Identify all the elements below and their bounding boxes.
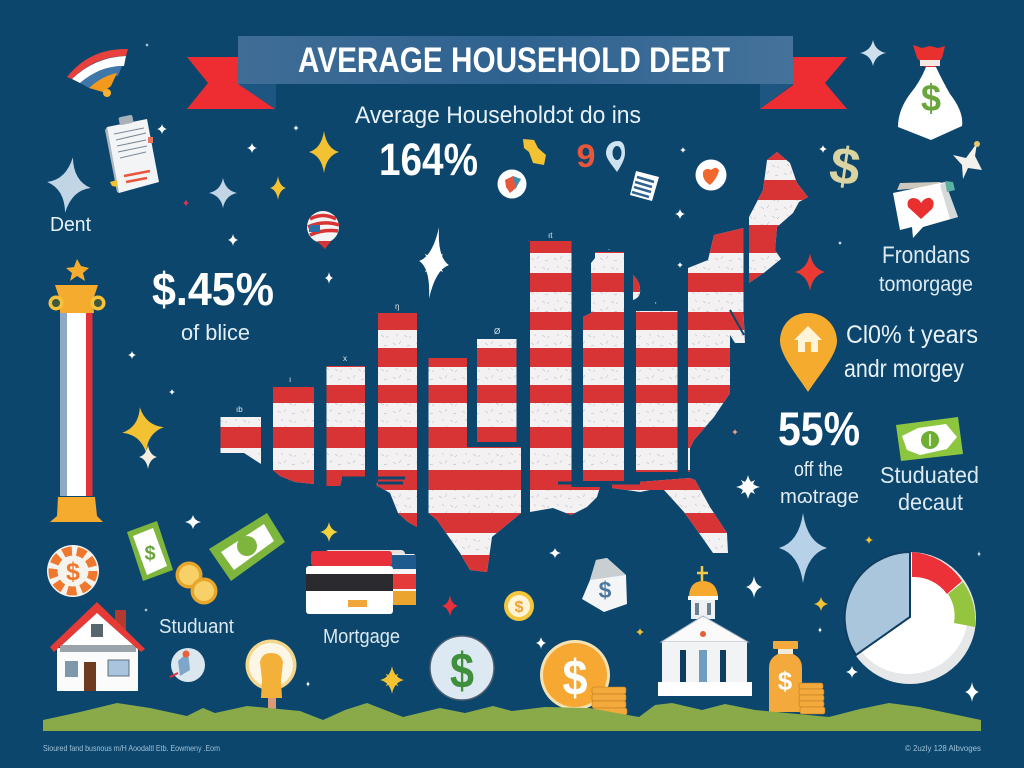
green hills xyxy=(43,703,981,731)
icon: money bag xyxy=(898,45,962,140)
small map markers: Ø xyxy=(494,327,500,336)
footer right: © 2uzly 128 Albvoges xyxy=(905,743,981,753)
icon: banknote small: $ xyxy=(144,543,156,565)
icon: green dollar coin: $ xyxy=(450,643,474,699)
icon: white star with tip xyxy=(953,141,982,179)
label: Frondans tomorgage: tomorgage xyxy=(879,273,973,296)
text icon: 9 and pin xyxy=(576,138,625,174)
stat: $.45% of blice: of blice xyxy=(181,320,250,345)
icon: yellow tag xyxy=(523,139,546,165)
icon: coin stack right xyxy=(799,683,825,714)
stat: 10 years mortgage: Cl0% t years xyxy=(846,321,978,349)
icon: orange location pin with house xyxy=(780,313,837,392)
footer left: Sioured fand busnous m/H Aoodaltl Etb. Eowmeny .Eom xyxy=(43,743,220,753)
small map markers: x xyxy=(343,354,347,363)
label: Studuated decaut: Studuated xyxy=(880,462,979,488)
icon: poker chip: $ xyxy=(66,558,80,586)
icon: clipboard xyxy=(105,115,159,193)
stat: $.45% of blice: $.45% xyxy=(152,263,274,315)
icon: large gold coin: $ xyxy=(562,650,588,706)
small map markers: ıb xyxy=(236,405,243,414)
decorative stars xyxy=(43,40,981,702)
label: Dent: Dent xyxy=(50,214,91,236)
label: Studuated decaut xyxy=(880,462,979,515)
icon: gold jar xyxy=(769,641,802,712)
icon: paper bag xyxy=(582,558,627,612)
stat: 55% off the mortgage: 55% xyxy=(778,402,860,455)
striped US map xyxy=(200,140,820,580)
icon: banknote small xyxy=(127,521,173,581)
pie chart xyxy=(844,552,976,684)
title: AVERAGE HOUSEHOLD DEBT xyxy=(298,41,730,80)
icon: capitol building xyxy=(658,566,752,696)
icon: banknote large xyxy=(209,513,285,581)
text icon: 9 and pin: 9 xyxy=(576,138,596,174)
small map markers: ' xyxy=(655,301,657,310)
icon: document xyxy=(630,171,659,201)
small map markers: ŋ xyxy=(395,302,399,311)
icon: heart badge xyxy=(696,160,726,190)
icon: house xyxy=(50,602,145,691)
stat: 10 years mortgage: andr morgey xyxy=(844,355,964,383)
icon: money bag: $ xyxy=(921,78,941,120)
stat: 164%: 164% xyxy=(379,134,478,185)
icon: paper bag: $ xyxy=(599,577,612,603)
label: Studuated decaut: decaut xyxy=(898,489,964,515)
stat: $.45% of blice xyxy=(152,263,274,345)
small map markers: ı xyxy=(289,375,291,384)
icon: credit cards xyxy=(306,550,416,614)
icon: message with heart xyxy=(893,181,958,238)
stat: 10 years mortgage xyxy=(844,321,978,383)
icon: flag pin xyxy=(307,211,339,249)
icon: coin stack xyxy=(592,687,627,715)
small map markers: ıt xyxy=(548,231,553,240)
icon: rainbow wifi xyxy=(67,49,128,97)
icon: column xyxy=(48,259,106,522)
stat: 55% off the mortgage: mɷtrage xyxy=(780,486,859,508)
icon: gold coins xyxy=(176,562,218,604)
stat: 55% off the mortgage xyxy=(778,402,860,508)
icon: gold dollar sign: $ xyxy=(826,136,864,198)
icon: poker chip xyxy=(47,545,99,597)
title banner xyxy=(187,36,847,109)
subtitle: Average Householdɔt do ins xyxy=(355,102,641,129)
label: Studuant: Studuant xyxy=(159,616,234,638)
icon: gold jar: $ xyxy=(778,666,793,696)
stat: 55% off the mortgage: off the xyxy=(794,459,843,481)
map state gaps xyxy=(342,310,744,483)
icon: small coin: $ xyxy=(515,599,524,616)
label: Frondans tomorgage: Frondans xyxy=(882,242,970,269)
small map markers xyxy=(236,231,657,414)
small map markers: . xyxy=(608,243,610,252)
icon: green dollar coin xyxy=(430,636,494,700)
icon: round badge xyxy=(498,170,526,198)
icon: small coin xyxy=(504,591,534,621)
icon: banknote right xyxy=(896,417,963,461)
icon: large gold coin xyxy=(540,640,610,710)
icon: globe person xyxy=(170,648,205,682)
icon: lightbulb xyxy=(246,640,296,715)
label: Mortgage: Mortgage xyxy=(323,626,400,648)
label: Frondans tomorgage xyxy=(879,242,973,296)
